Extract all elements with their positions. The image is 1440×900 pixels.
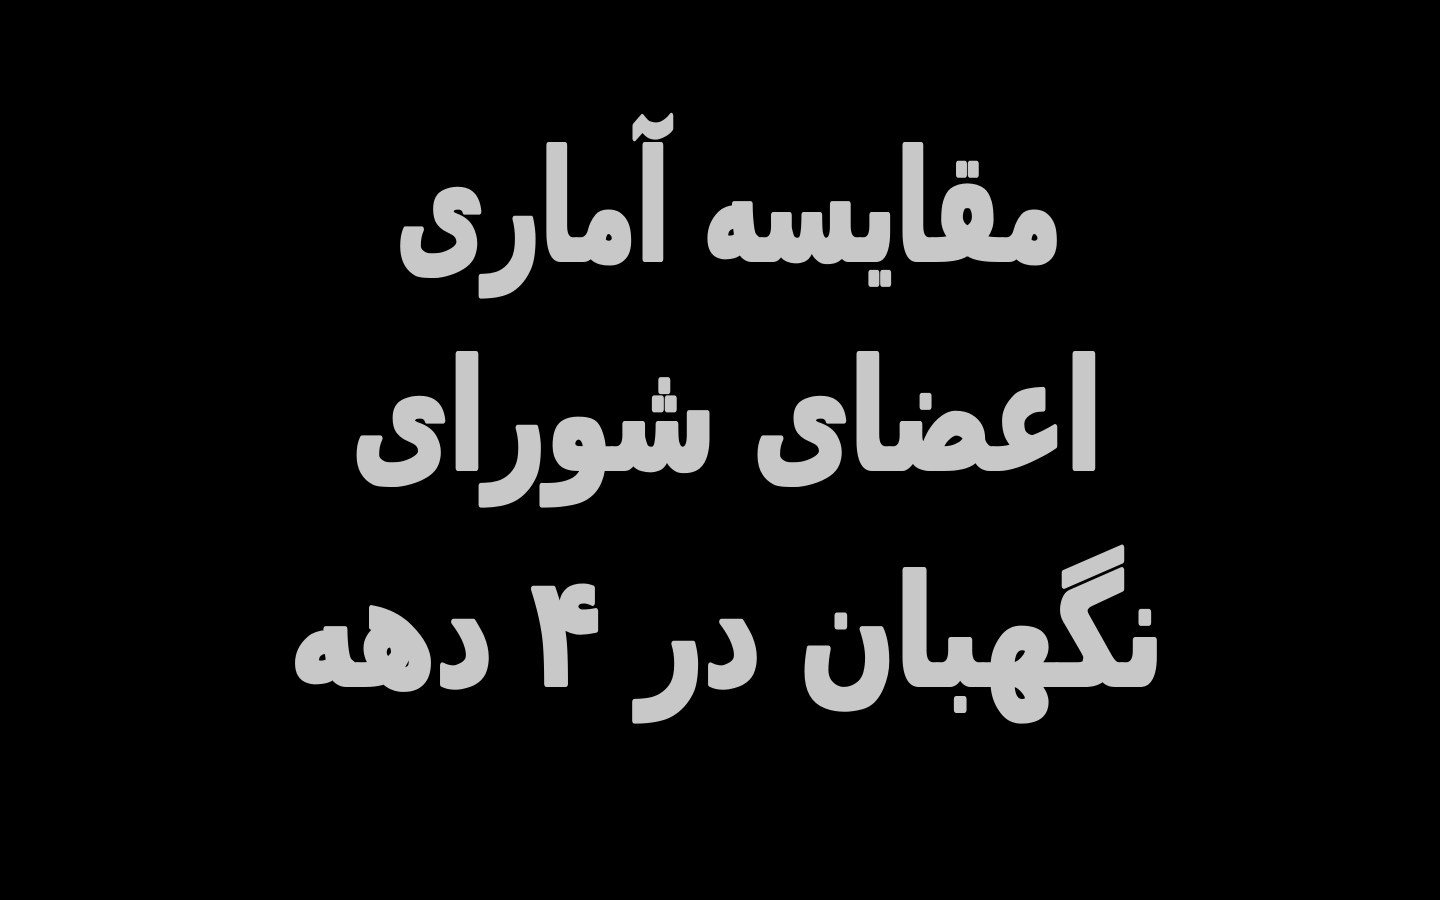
title line 3: نگهبان در ۴ دهه — [290, 546, 1164, 721]
title line 1: مقایسه آماری — [396, 116, 1062, 296]
title line 2: اعضای شورای — [352, 330, 1102, 505]
